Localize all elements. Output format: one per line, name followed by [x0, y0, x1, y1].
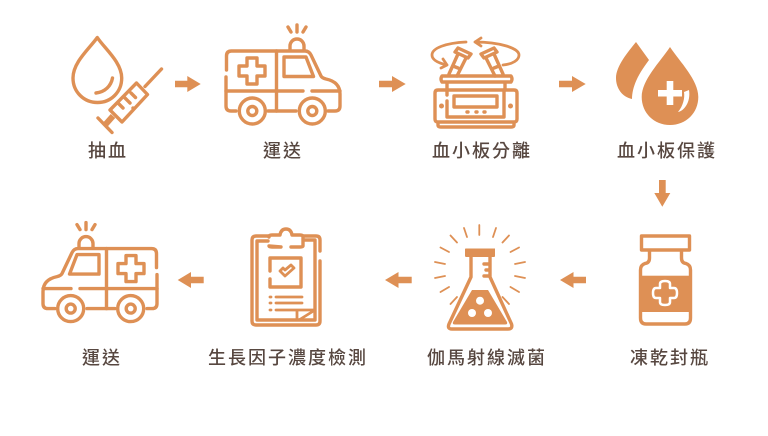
- icon: blood drop and syringe: [73, 38, 162, 132]
- arrow down: [654, 180, 670, 207]
- label: 伽馬射線滅菌: 伽馬射線滅菌: [427, 348, 547, 368]
- arrow 1: [175, 76, 201, 92]
- arrow left 2: [385, 272, 412, 288]
- label: 血小板保護: 血小板保護: [617, 141, 717, 161]
- label: 運送: 運送: [82, 348, 122, 368]
- icon: flask with rays: [435, 225, 525, 329]
- arrow 2: [379, 76, 406, 92]
- arrow 3: [559, 76, 586, 92]
- label: 生長因子濃度檢測: 生長因子濃度檢測: [208, 348, 368, 368]
- icon: ambulance mirrored: [43, 223, 157, 322]
- label: 血小板分離: 血小板分離: [432, 141, 532, 161]
- icon: drops with plus: [616, 42, 698, 125]
- icon: centrifuge: [432, 38, 519, 127]
- arrow left 1: [560, 272, 586, 288]
- icon: clipboard: [252, 229, 320, 325]
- label: 凍乾封瓶: 凍乾封瓶: [630, 348, 710, 368]
- icon: vial: [640, 236, 691, 324]
- icon: ambulance: [226, 25, 340, 124]
- label: 運送: 運送: [263, 141, 303, 161]
- arrow left 3: [178, 272, 204, 288]
- label: 抽血: 抽血: [88, 141, 128, 161]
